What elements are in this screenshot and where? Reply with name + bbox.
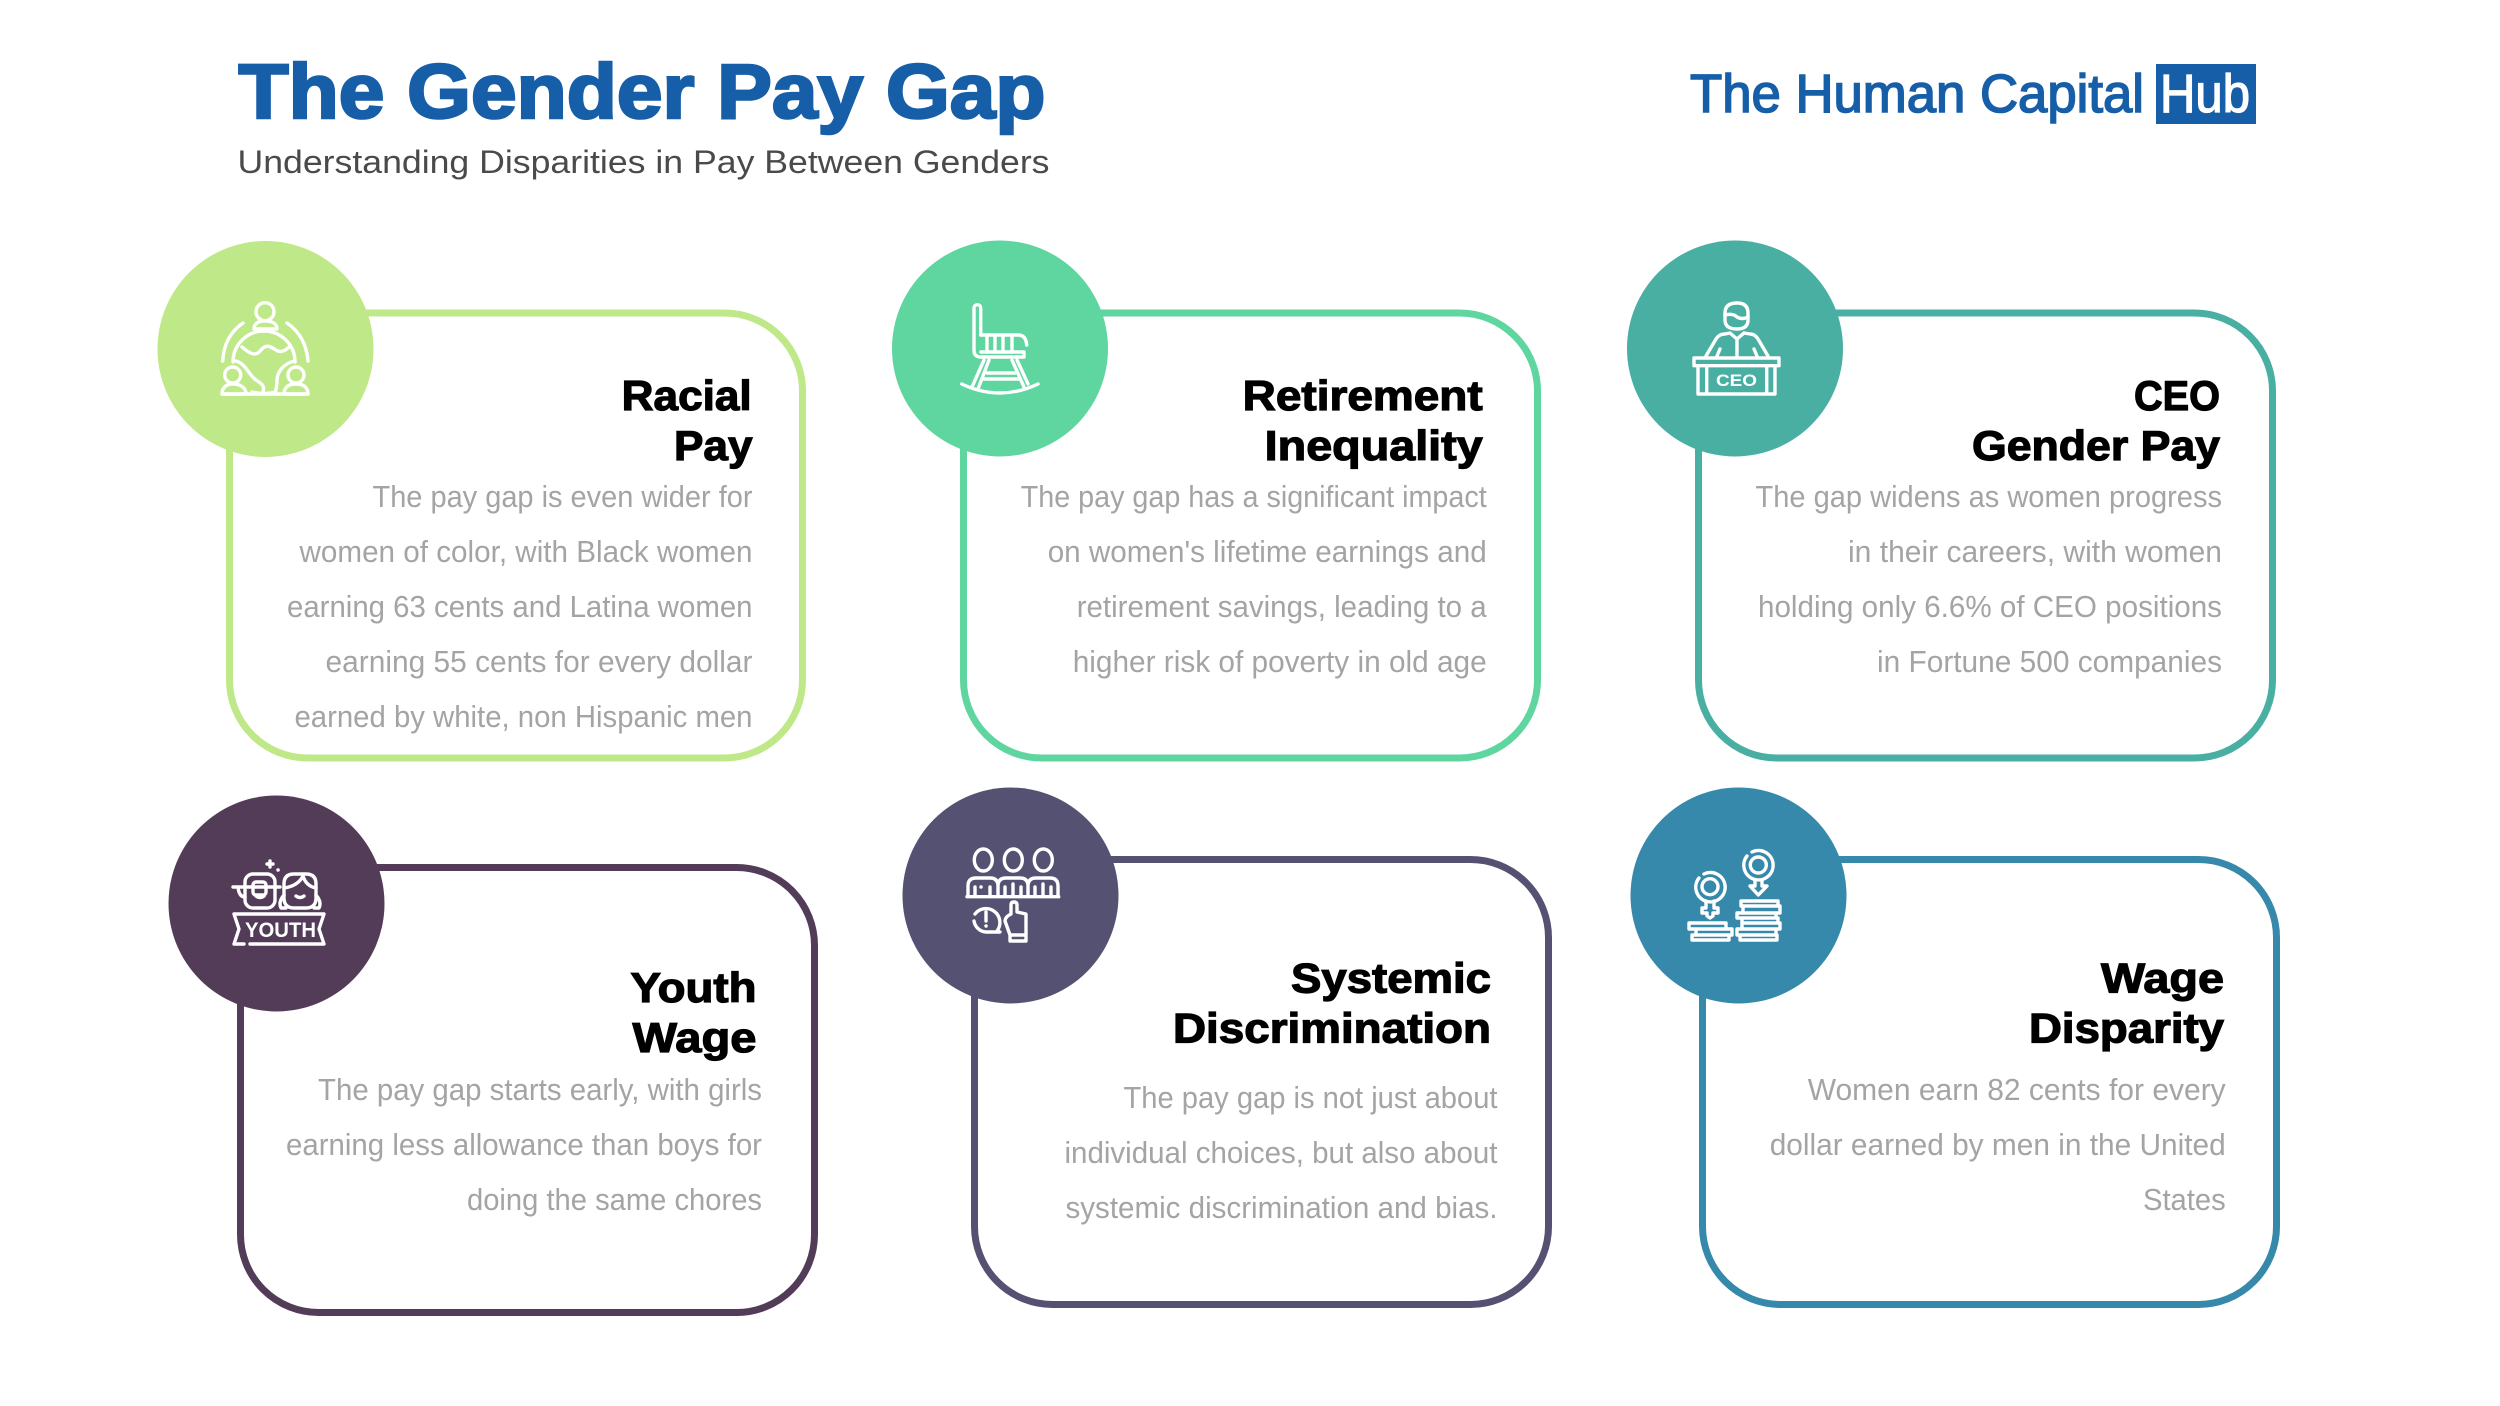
- heading: [1243, 372, 1483, 469]
- heading: Pay: [674, 422, 753, 469]
- body text: on women's lifetime earnings and: [1048, 535, 1487, 569]
- body text: [1770, 1073, 2226, 1217]
- heading: Gender Pay: [1972, 422, 2221, 469]
- heading: [2029, 954, 2225, 1052]
- body text: dollar earned by men in the United: [1770, 1128, 2226, 1162]
- body text: higher risk of poverty in old age: [1073, 645, 1487, 679]
- icon: rocking chair: [892, 240, 1108, 456]
- heading: Systemic: [1291, 954, 1491, 1002]
- body text: The pay gap has a significant impact: [1021, 480, 1487, 514]
- icon: youth: [168, 796, 384, 1012]
- panel: systemic discrimination: [902, 788, 1548, 1304]
- heading: [622, 372, 753, 469]
- heading: Disparity: [2029, 1004, 2225, 1052]
- body text: [286, 1073, 762, 1217]
- icon: racial pay: [158, 241, 374, 457]
- panel: wage disparity: [1630, 788, 2276, 1304]
- body text: women of color, with Black women: [299, 535, 752, 569]
- body text: in Fortune 500 companies: [1877, 645, 2222, 679]
- body text: doing the same chores: [467, 1183, 762, 1217]
- icon: wage disparity: [1630, 788, 1846, 1004]
- body text: [1021, 480, 1487, 679]
- body text: individual choices, but also about: [1064, 1136, 1498, 1170]
- heading: CEO: [2134, 372, 2220, 419]
- body text: earned by white, non Hispanic men: [294, 700, 752, 734]
- body text: Women earn 82 cents for every: [1808, 1073, 2226, 1107]
- body text: States: [2143, 1183, 2226, 1217]
- body text: The pay gap is even wider for: [372, 480, 752, 514]
- heading: [630, 964, 756, 1061]
- panel: ceo gender pay: [1627, 240, 2272, 758]
- panel: racial pay: [158, 241, 802, 758]
- body text: The pay gap is not just about: [1124, 1081, 1498, 1115]
- heading: [1173, 954, 1491, 1052]
- title: The Gender Pay Gap: [238, 49, 1046, 135]
- body text: The pay gap starts early, with girls: [318, 1073, 762, 1107]
- body text: in their careers, with women: [1848, 535, 2222, 569]
- body text: systemic discrimination and bias.: [1066, 1191, 1498, 1225]
- body text: The gap widens as women progress: [1756, 480, 2222, 514]
- heading: Youth: [630, 964, 756, 1011]
- heading: Retirement: [1243, 372, 1483, 419]
- body text: earning less allowance than boys for: [286, 1128, 762, 1162]
- body text: earning 63 cents and Latina women: [287, 590, 752, 624]
- subtitle: Understanding Disparities in Pay Between Genders: [238, 144, 1050, 180]
- logo: Hub: [2160, 64, 2250, 124]
- heading: [1972, 372, 2221, 469]
- body text: [287, 480, 752, 734]
- heading: Racial: [622, 372, 752, 419]
- heading: Inequality: [1265, 422, 1483, 469]
- icon: youth: YOUTH: [245, 919, 316, 942]
- body text: retirement savings, leading to a: [1077, 590, 1487, 624]
- body text: holding only 6.6% of CEO positions: [1758, 590, 2222, 624]
- body text: [1064, 1081, 1498, 1225]
- icon: ceo at desk: CEO: [1716, 371, 1757, 390]
- heading: Wage: [2101, 954, 2224, 1002]
- heading: Wage: [632, 1014, 756, 1061]
- body text: [1756, 480, 2222, 679]
- body text: earning 55 cents for every dollar: [326, 645, 752, 679]
- panel: youth wage: [168, 796, 814, 1312]
- heading: Discrimination: [1173, 1004, 1491, 1052]
- logo: The Human Capital: [1690, 64, 2144, 124]
- panel: retirement inequality: [892, 240, 1538, 758]
- icon: ceo at desk: [1627, 240, 1843, 456]
- icon: systemic discrimination: [902, 788, 1118, 1004]
